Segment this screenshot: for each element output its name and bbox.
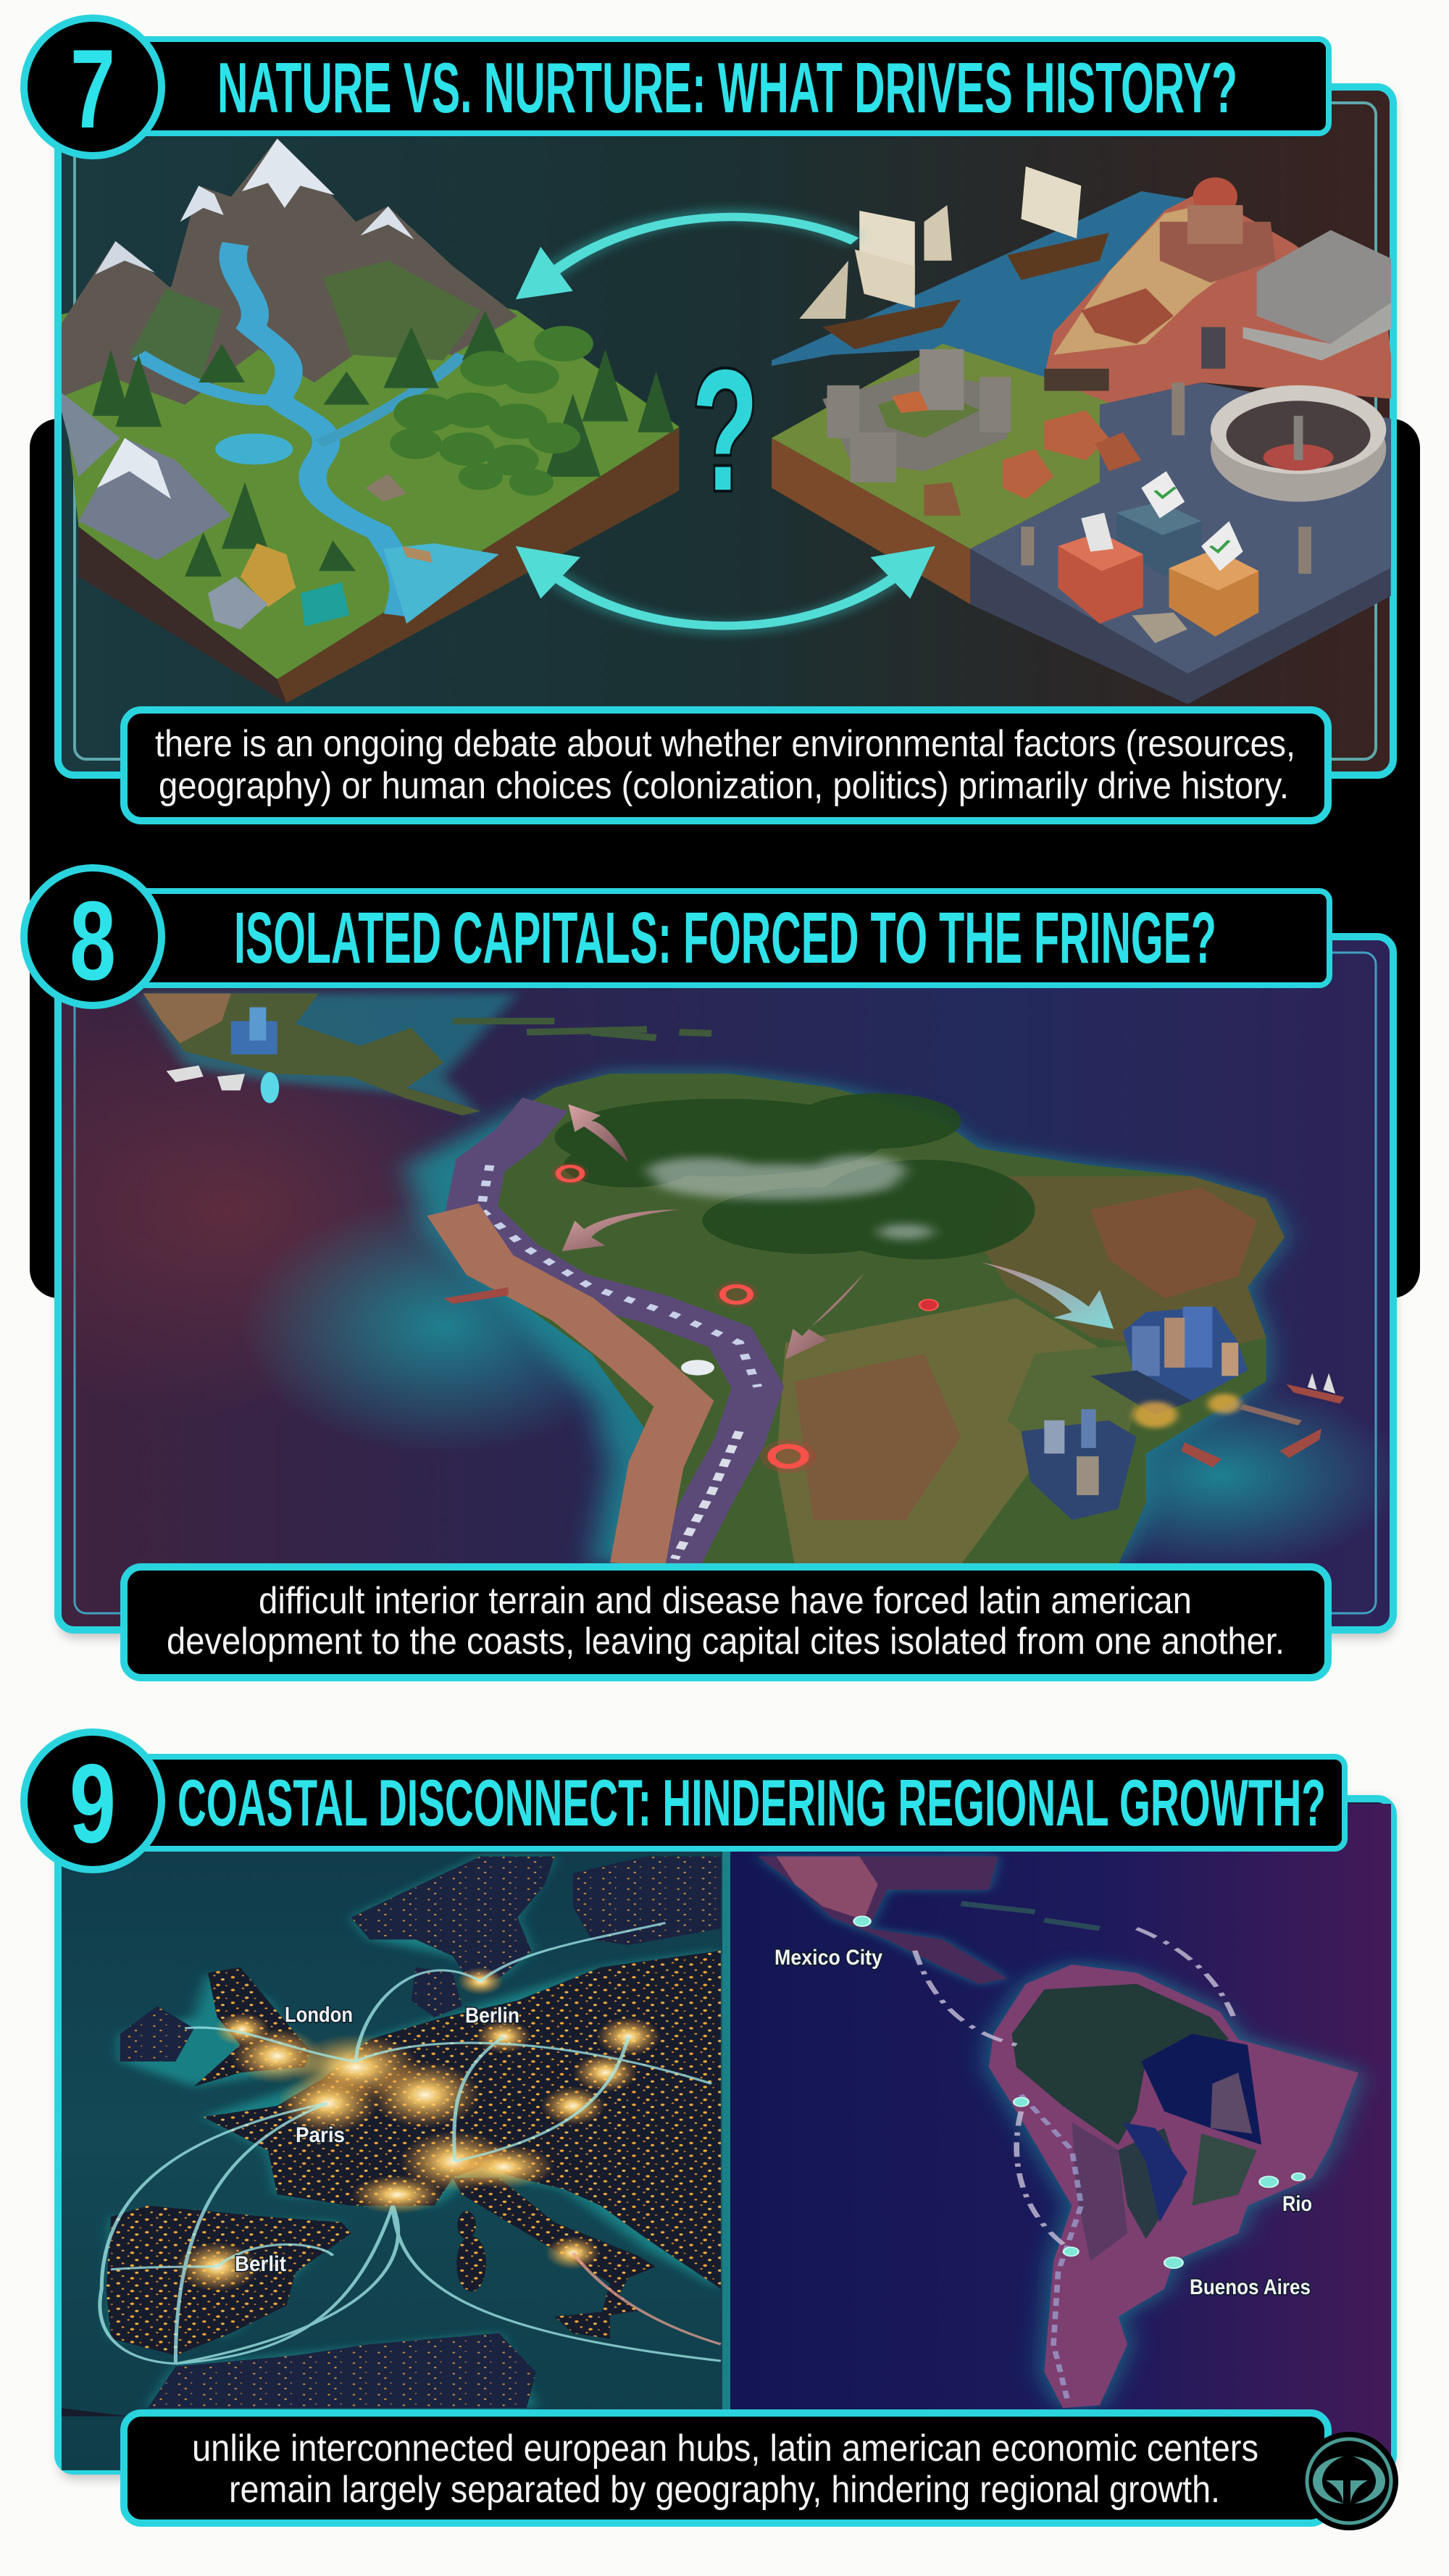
map labels: Berlin [465, 2004, 519, 2028]
map labels: Paris [296, 2123, 345, 2147]
ballot boxes [1058, 472, 1258, 643]
number badge 9: 9 [70, 1741, 116, 1866]
panel 8: isolated capitals [0, 868, 1405, 1678]
panel 7 frame [58, 87, 1394, 780]
number badge 7 [24, 18, 162, 156]
map labels: Mexico City [774, 1946, 882, 1970]
arrow: nurture to nature [516, 215, 855, 299]
logo badge [1300, 2432, 1398, 2530]
panel 8 frame [58, 937, 1394, 1637]
caption 9 [124, 2413, 1328, 2523]
black backdrop behind panels [30, 419, 1420, 1298]
map labels: Berlit [235, 2252, 286, 2276]
coastal cities [1021, 1307, 1248, 1520]
panel 7: nature vs nurture [24, 18, 1405, 821]
question mark: ? [692, 335, 759, 527]
broken links [915, 1928, 1234, 2247]
Central America land [143, 993, 711, 1116]
arrows inland to the coast [562, 1104, 1114, 1359]
caption 9: unlike interconnected european hubs, latin american economic centers [192, 2427, 1258, 2470]
caption 8 [124, 1567, 1328, 1678]
caption 8: difficult interior terrain and disease have forced latin american [259, 1580, 1192, 1622]
caption 7: there is an ongoing debate about whether environmental factors (resources, [155, 723, 1295, 765]
South America land [453, 1074, 1285, 1565]
temple [1243, 230, 1395, 360]
ships [799, 167, 1109, 349]
disease icons [551, 1163, 938, 1473]
map labels [235, 1946, 1312, 2299]
panel 9: coastal disconnect [24, 1732, 1394, 2523]
number badge 8: 8 [70, 878, 116, 1003]
illustration: nature and nurture dioramas [56, 138, 1405, 704]
number badge 7: 7 [70, 26, 115, 151]
glowing coasts [111, 1857, 721, 2408]
dome and palace [1160, 177, 1275, 283]
city nodes [854, 1916, 1305, 2268]
mist [647, 1155, 933, 1239]
arrow: two-way [516, 546, 935, 628]
South America [989, 1965, 1358, 2408]
number badge 8 [24, 868, 162, 1005]
caption 8: development to the coasts, leaving capital cites isolated from one another. [167, 1621, 1285, 1663]
map labels: Buenos Aires [1190, 2275, 1311, 2299]
map: Latin America relief [0, 993, 1405, 1570]
columns [1021, 327, 1311, 574]
land masses [61, 1857, 721, 2417]
terrain block: nature [56, 138, 679, 703]
map: Latin America at night [730, 1804, 1391, 2470]
Andes [472, 1104, 758, 1565]
panel 9 frame [58, 1799, 1394, 2478]
city block: nurture [772, 167, 1405, 704]
caption 9: remain largely separated by geography, hindering regional growth. [229, 2469, 1220, 2511]
colosseum [1211, 385, 1386, 502]
caption 7: geography) or human choices (colonization, politics) primarily drive history. [159, 765, 1289, 807]
rainforest [554, 1093, 1035, 1260]
caption 7 [124, 710, 1328, 821]
coastal glow [138, 993, 1405, 1570]
ships at the coast [443, 1287, 1345, 1468]
castle [822, 349, 1011, 482]
number badge 9 [24, 1732, 162, 1870]
network lines [100, 1923, 721, 2364]
map: Europe at night [61, 1804, 1391, 2470]
map labels: Rio [1282, 2192, 1312, 2216]
map labels: London [285, 2003, 353, 2027]
houses [924, 288, 1174, 516]
city hubs [175, 1967, 661, 2291]
